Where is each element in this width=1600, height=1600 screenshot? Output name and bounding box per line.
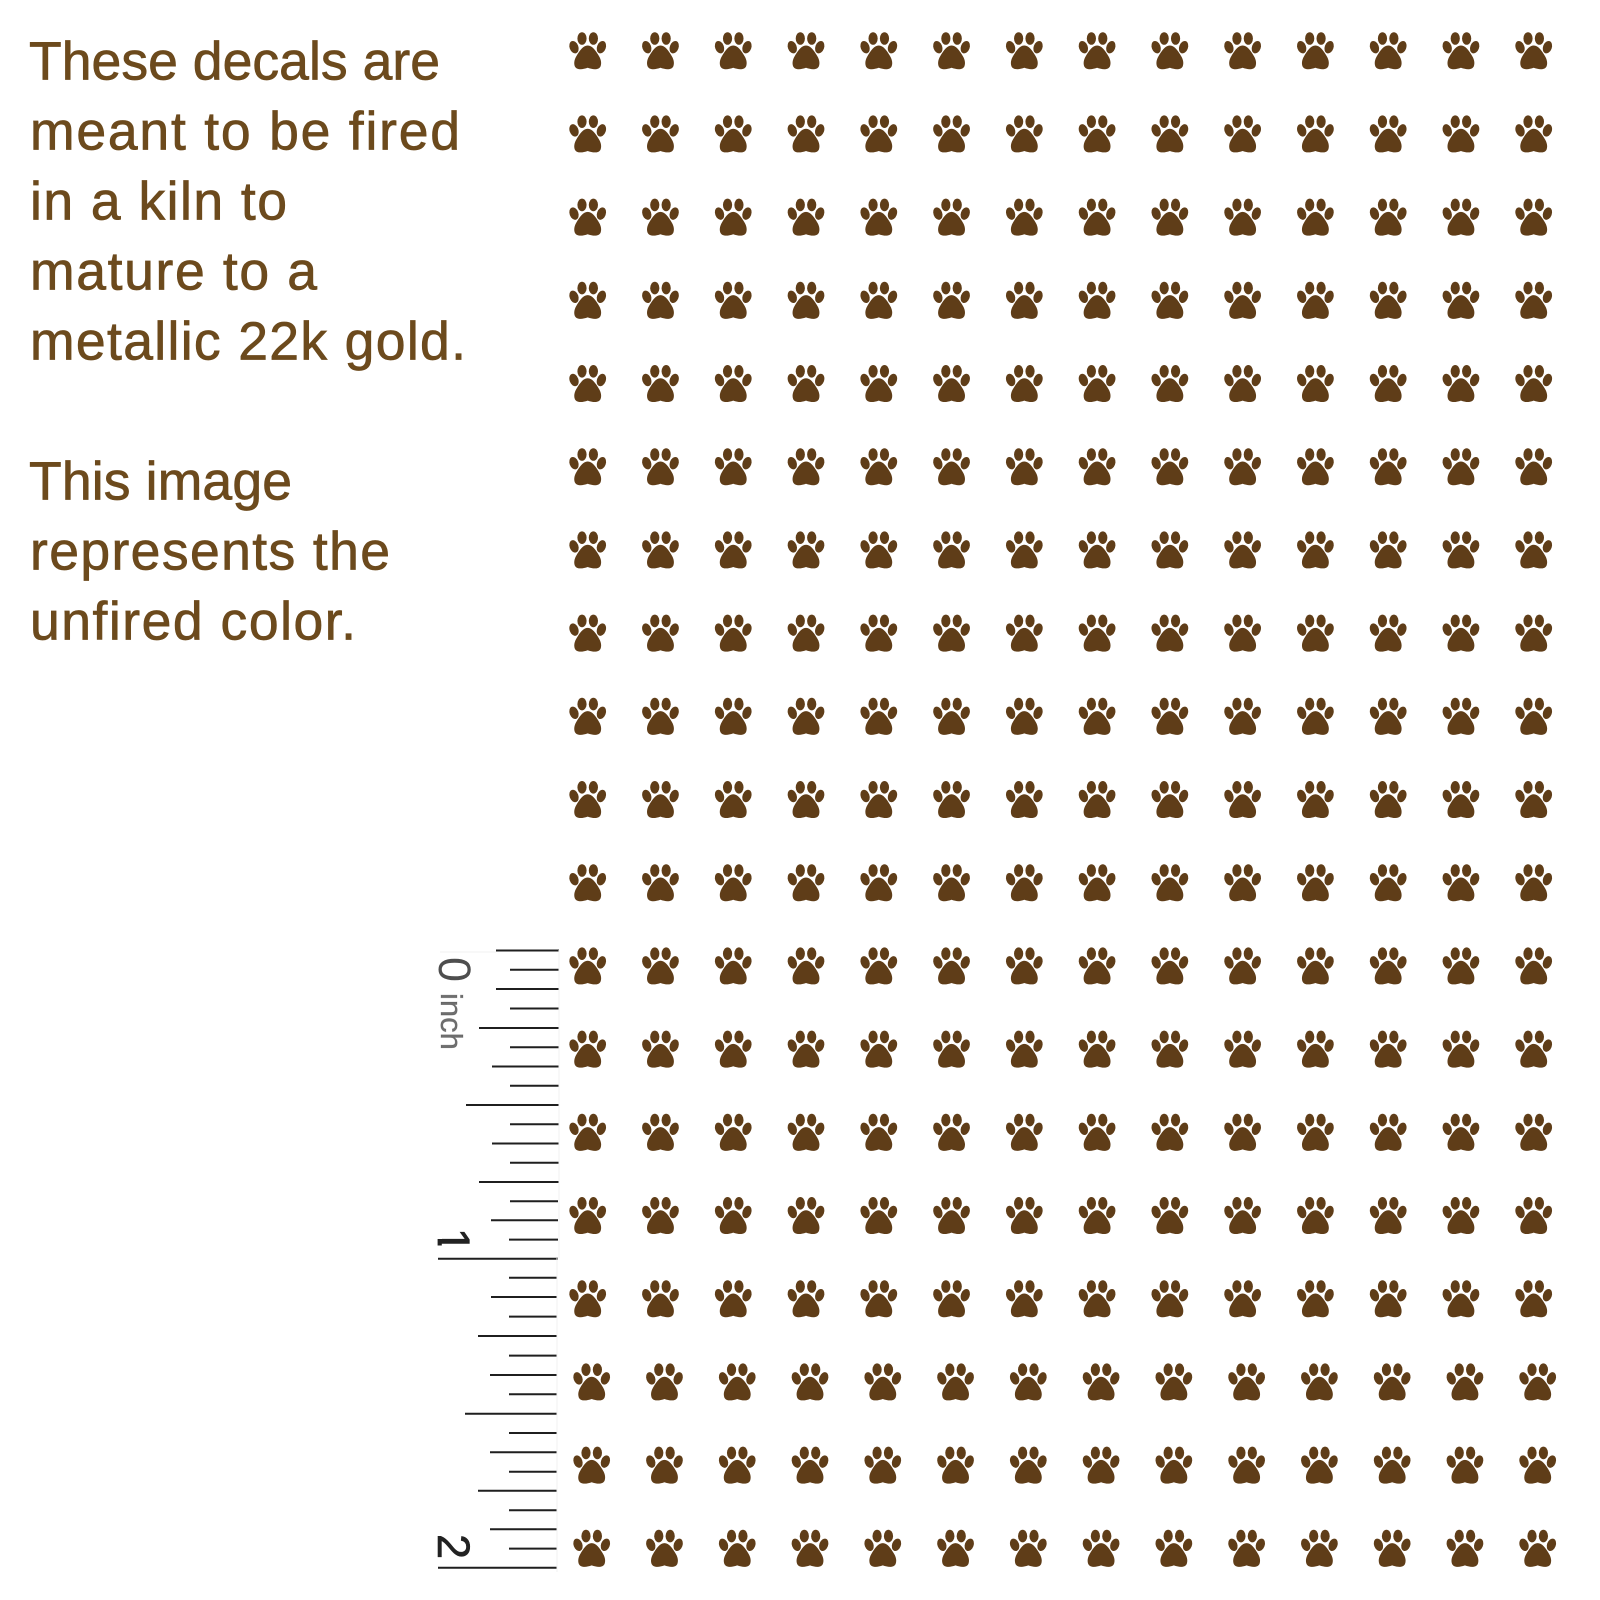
paw row 1 — [568, 32, 1554, 69]
paw row 12 — [568, 947, 1554, 984]
paw row 2 — [568, 115, 1554, 152]
paw row 16 — [568, 1280, 1554, 1317]
text block: colour note — [29, 452, 390, 652]
text line: in a kiln to: in a kiln to — [30, 172, 287, 232]
text line: represents the: represents the — [30, 522, 390, 582]
text line: mature to a: mature to a — [30, 242, 317, 302]
text line: meant to be fired: meant to be fired — [30, 102, 460, 162]
ruler label: 2: 2 — [428, 1534, 479, 1559]
paw row 8 — [568, 615, 1554, 652]
paw row 11 — [568, 864, 1554, 901]
paw row 3 — [568, 199, 1554, 236]
paw row 4 — [568, 282, 1554, 319]
paw row 15 — [568, 1197, 1554, 1234]
text line: These decals are: These decals are — [29, 32, 440, 92]
paw row 6 — [568, 448, 1554, 485]
text block: firing note — [29, 32, 466, 372]
paw row 7 — [568, 531, 1554, 568]
paw print decal grid — [568, 32, 1558, 1567]
paw row 5 — [568, 365, 1554, 402]
paw row 19 — [572, 1530, 1558, 1567]
paw row 14 — [568, 1114, 1554, 1151]
paw row 9 — [568, 698, 1554, 735]
text line: unfired color.: unfired color. — [30, 592, 356, 652]
text line: This image: This image — [29, 452, 292, 512]
inch ruler — [428, 950, 559, 1572]
paw row 10 — [568, 781, 1554, 818]
ruler edge — [440, 950, 559, 1572]
paw row 18 — [572, 1447, 1558, 1484]
ruler label: 1: 1 — [428, 1228, 479, 1253]
ruler tick marks — [438, 950, 559, 1568]
text line: metallic 22k gold.: metallic 22k gold. — [30, 312, 466, 372]
ruler label: inch: inch — [434, 993, 469, 1050]
ruler label: 0: 0 — [429, 957, 480, 982]
paw row 17 — [572, 1363, 1558, 1400]
paw row 13 — [568, 1031, 1554, 1068]
